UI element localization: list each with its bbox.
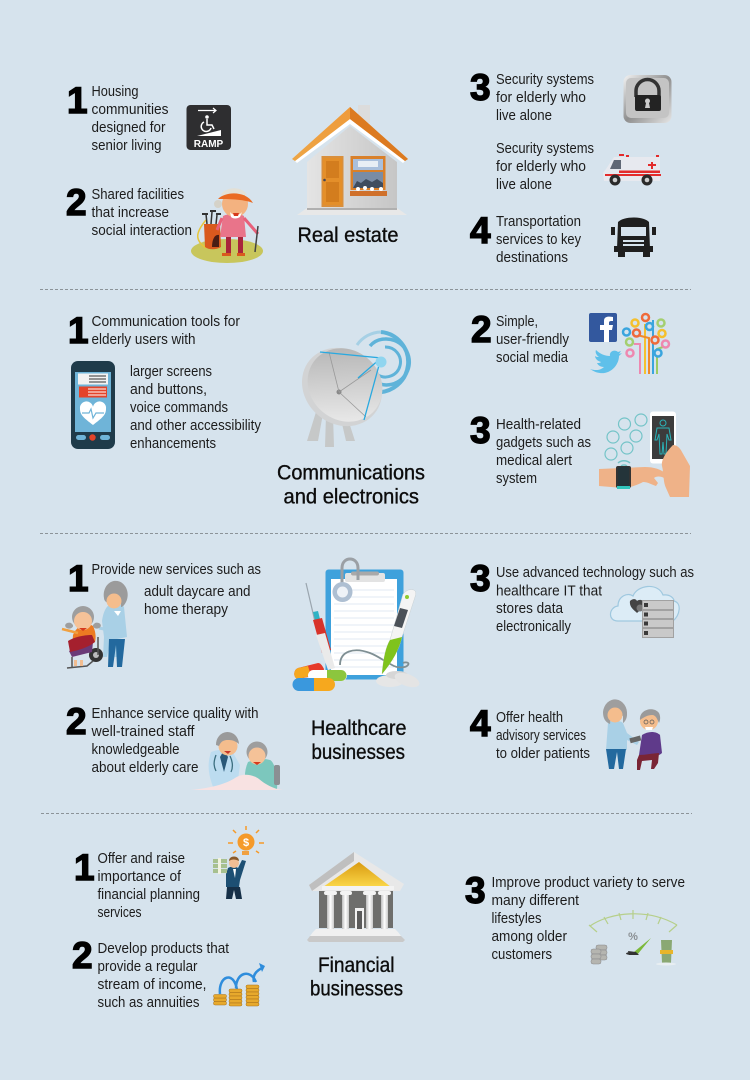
item: shared facilities: 2 — [66, 182, 87, 223]
item: financial planning: services — [98, 904, 142, 921]
icon: growing coins — [214, 963, 265, 1006]
item: financial planning: Offer and raise — [98, 850, 185, 867]
icon: cloud server — [610, 586, 679, 638]
item: social media: Simple, — [496, 313, 538, 330]
text: accessibility features: enhancements — [130, 435, 216, 452]
item: security systems second: Security systems — [496, 140, 594, 157]
icon: bank building — [307, 852, 405, 942]
item: transportation: Transportation — [496, 213, 581, 230]
item: health gadgets — [470, 410, 591, 487]
item: social media — [471, 309, 569, 366]
item: housing communities — [67, 80, 168, 154]
item: regular income products: stream of income, — [98, 976, 206, 993]
item: healthcare IT: Use advanced technology such as — [496, 564, 694, 581]
item: communication tools: 1 — [68, 310, 89, 351]
icon: health phone and smartwatch — [599, 412, 690, 497]
item: financial planning: importance of — [98, 868, 182, 885]
icon: doctor and patient — [191, 732, 283, 790]
heading: financial businesses: Financial — [318, 954, 394, 977]
icon: gauge with coins and cash — [589, 910, 677, 966]
icon: gauge with coins and cash: % — [628, 931, 638, 943]
icon: nurse and older patient — [603, 699, 662, 770]
item: regular income products: Develop products that — [98, 940, 230, 957]
item: healthcare IT — [470, 558, 694, 635]
item: communication tools: Communication tools for — [92, 313, 240, 330]
icon: ramp sign: RAMP — [194, 139, 224, 150]
item: housing communities: Housing — [92, 83, 138, 100]
item: new services — [68, 558, 261, 618]
icon: golfer — [191, 188, 263, 263]
icon: phone with heart — [71, 361, 115, 449]
item: regular income products: such as annuities — [98, 994, 200, 1011]
item: shared facilities: social interaction — [92, 222, 192, 239]
item: service quality: Enhance service quality with — [92, 705, 258, 722]
item: product variety: many different — [492, 892, 580, 909]
item: communication tools — [68, 310, 240, 351]
item: security systems: live alone — [496, 107, 552, 124]
item: housing communities: communities — [92, 101, 168, 118]
item: health gadgets: system — [496, 470, 537, 487]
text: accessibility features: larger screens — [130, 363, 212, 380]
item: service quality: knowledgeable — [92, 741, 180, 758]
item: product variety: customers — [492, 946, 552, 963]
icon: businessman with idea: $ — [243, 837, 249, 849]
item: service quality: about elderly care — [92, 759, 198, 776]
heading: healthcare businesses — [311, 717, 406, 764]
icon: house — [292, 105, 408, 215]
item: service quality: well-trained staff — [91, 723, 195, 740]
item: service quality — [66, 701, 258, 776]
icon: ramp sign — [186, 105, 231, 150]
item: housing communities: 1 — [67, 80, 88, 121]
item: health advisory: Offer health — [496, 709, 563, 726]
heading: real estate: Real estate — [298, 224, 398, 247]
text: accessibility features: and other accessibility — [130, 417, 261, 434]
item: product variety: 3 — [465, 870, 486, 911]
item: health gadgets: gadgets such as — [496, 434, 591, 451]
item: healthcare IT: healthcare IT that — [496, 582, 603, 600]
text: accessibility features — [130, 363, 261, 452]
item: housing communities: designed for — [92, 119, 166, 136]
item: healthcare IT: stores data — [496, 600, 564, 617]
icon: bus — [611, 218, 656, 257]
icon: ambulance — [603, 154, 661, 186]
text: accessibility features: and buttons, — [130, 381, 207, 398]
panel: real estate — [66, 67, 672, 266]
item: health gadgets: Health-related — [496, 416, 581, 433]
item: housing communities: senior living — [92, 137, 162, 154]
item: shared facilities: Shared facilities — [92, 186, 184, 203]
icon: facebook logo — [589, 313, 617, 342]
item: new services: home therapy — [144, 601, 228, 618]
heading: healthcare businesses: businesses — [312, 741, 405, 764]
icon: caregiver and wheelchair — [62, 581, 128, 668]
item: security systems second — [496, 140, 594, 193]
item: health gadgets: medical alert — [496, 452, 573, 469]
item: transportation — [470, 210, 581, 266]
item: new services: Provide new services such as — [92, 561, 261, 578]
heading: financial businesses: businesses — [310, 978, 403, 1000]
icon: padlock — [624, 75, 672, 123]
item: security systems: Security systems — [496, 71, 594, 88]
item: regular income products: 2 — [72, 935, 93, 976]
panel: financial businesses — [72, 826, 685, 1011]
item: health advisory — [470, 703, 590, 762]
heading: healthcare businesses: Healthcare — [311, 717, 406, 740]
item: health gadgets: 3 — [470, 410, 491, 451]
icon: social media tree — [623, 314, 669, 374]
item: financial planning: financial planning — [98, 886, 200, 903]
item: product variety: among older — [492, 928, 567, 945]
item: shared facilities: that increase — [92, 204, 169, 221]
icon: businessman with idea — [213, 826, 264, 899]
panel: healthcare businesses — [62, 558, 694, 790]
item: communication tools: elderly users with — [92, 331, 196, 348]
item: regular income products: provide a regular — [98, 958, 198, 975]
item: security systems: for elderly who — [496, 89, 586, 106]
item: social media: 2 — [471, 309, 492, 350]
item: health advisory: advisory services — [496, 727, 586, 744]
item: security systems: 3 — [470, 67, 491, 108]
item: health advisory: 4 — [470, 703, 491, 744]
heading: communications and electronics — [277, 462, 425, 508]
item: financial planning: 1 — [74, 847, 95, 888]
item: security systems second: live alone — [496, 176, 552, 193]
item: health advisory: to older patients — [496, 745, 590, 762]
item: product variety — [465, 870, 685, 963]
icon: satellite dish — [286, 332, 409, 447]
icon: twitter bird — [590, 350, 622, 373]
icon: clipboard with medical tools — [292, 559, 421, 691]
item: product variety: lifestyles — [492, 910, 542, 927]
item: product variety: Improve product variety to serve — [492, 874, 685, 891]
item: social media: user-friendly — [496, 331, 569, 348]
item: regular income products — [72, 935, 230, 1011]
item: service quality: 2 — [66, 701, 87, 742]
item: security systems second: for elderly who — [496, 158, 586, 175]
text: accessibility features: voice commands — [130, 399, 228, 416]
item: security systems — [470, 67, 594, 124]
item: transportation: 4 — [470, 210, 491, 251]
heading: communications and electronics: Communications — [277, 462, 425, 484]
item: healthcare IT: 3 — [470, 558, 491, 599]
item: transportation: services to key — [496, 231, 581, 248]
item: new services: adult daycare and — [144, 583, 250, 600]
item: shared facilities — [66, 182, 192, 239]
panel: communications and electronics — [68, 309, 690, 508]
item: transportation: destinations — [496, 249, 568, 266]
heading: financial businesses — [310, 954, 403, 1000]
item: social media: social media — [496, 349, 569, 366]
item: new services: 1 — [68, 558, 89, 599]
item: financial planning — [74, 847, 200, 921]
heading: communications and electronics: and electronics — [284, 486, 419, 508]
item: healthcare IT: electronically — [496, 618, 571, 635]
